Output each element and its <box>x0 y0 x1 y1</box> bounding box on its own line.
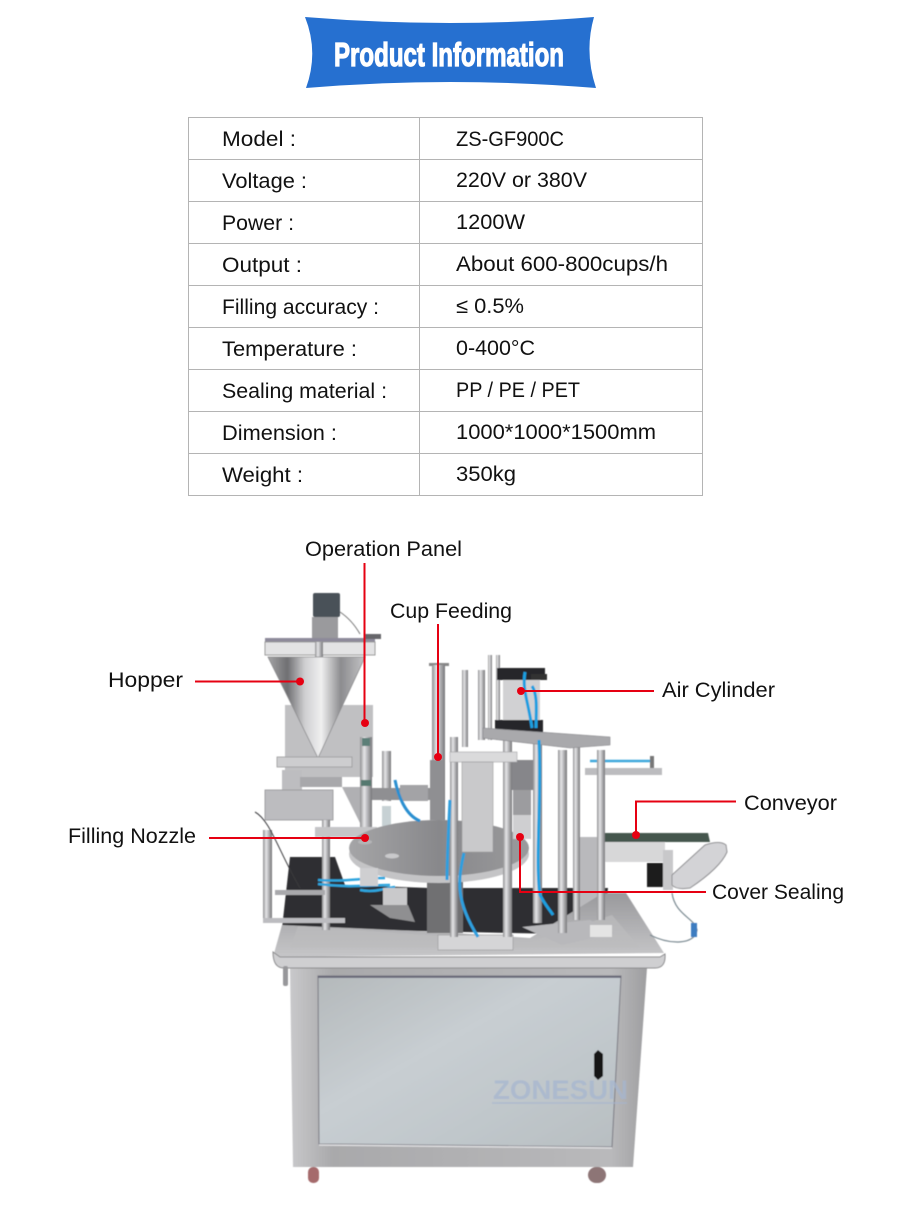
machine illustration <box>255 593 727 1183</box>
callout: operation panel: Operation Panel <box>305 538 462 561</box>
row: power <box>222 211 525 235</box>
row: dimension: Dimension : <box>222 422 337 445</box>
rear rods <box>462 655 500 747</box>
callout: filling nozzle <box>68 825 369 848</box>
callout: cup feeding: Cup Feeding <box>390 600 512 623</box>
row: weight: 350kg <box>456 463 516 486</box>
row: filling accuracy: Filling accuracy : <box>222 296 379 319</box>
row: output: Output : <box>222 254 302 277</box>
row: temperature <box>222 337 535 361</box>
front post assembly <box>438 737 517 950</box>
hopper motor <box>312 593 360 638</box>
row: power: Power : <box>222 212 294 235</box>
blue tubes lower <box>318 878 395 891</box>
callout: hopper: Hopper <box>108 669 183 692</box>
callout: air cylinder <box>517 679 775 702</box>
hopper frame <box>265 634 381 658</box>
table top <box>273 893 665 986</box>
cup feeding column <box>429 663 449 820</box>
row: power: 1200W <box>456 211 525 234</box>
conveyor <box>603 833 727 942</box>
right post assembly <box>483 728 615 945</box>
row: voltage <box>222 169 587 193</box>
sealing head <box>508 760 534 839</box>
row: model <box>222 128 564 151</box>
machine cabinet <box>290 968 647 1183</box>
row: model: Model : <box>222 128 296 151</box>
callout: conveyor: Conveyor <box>744 792 837 815</box>
hopper lower assembly <box>255 757 372 930</box>
callout: conveyor <box>632 792 837 839</box>
callout: hopper <box>108 669 304 692</box>
specification table <box>188 118 702 496</box>
back shadow area <box>282 857 608 935</box>
row: filling accuracy: ≤ 0.5% <box>456 295 524 318</box>
row: sealing material: Sealing material : <box>222 380 387 403</box>
row: filling accuracy <box>222 295 524 319</box>
banner title text: Product Information <box>334 36 564 73</box>
row: temperature: Temperature : <box>222 338 357 361</box>
callout: filling nozzle: Filling Nozzle <box>68 825 196 848</box>
watermark: ZONESUN <box>493 1075 628 1105</box>
row: dimension: 1000*1000*1500mm <box>456 421 656 444</box>
title banner <box>305 17 596 88</box>
row: weight: Weight : <box>222 464 303 487</box>
hopper cone <box>268 657 365 758</box>
row: weight <box>222 463 516 487</box>
row: sealing material <box>222 379 580 403</box>
callout: cover sealing <box>516 833 844 904</box>
callout: cup feeding <box>390 600 512 761</box>
hopper backing box <box>285 705 373 777</box>
rotary disc <box>349 820 529 933</box>
row: voltage: 220V or 380V <box>456 169 587 192</box>
pneumatic valve <box>395 780 428 821</box>
callout: operation panel <box>305 538 462 727</box>
callout: cover sealing: Cover Sealing <box>712 881 844 904</box>
row: output: About 600-800cups/h <box>456 253 668 276</box>
row: dimension <box>222 421 656 445</box>
row: output <box>222 253 668 277</box>
row: voltage: Voltage : <box>222 170 307 193</box>
filling nozzle cylinder <box>315 737 436 837</box>
row: sealing material: PP / PE / PET <box>456 379 580 402</box>
callout: air cylinder: Air Cylinder <box>662 679 775 702</box>
air cylinder <box>495 668 547 732</box>
row: temperature: 0-400°C <box>456 337 535 360</box>
lower valve block <box>360 868 415 922</box>
row: model: ZS-GF900C <box>456 128 564 151</box>
horizontal cylinder <box>585 756 662 775</box>
rear plate <box>577 837 604 917</box>
